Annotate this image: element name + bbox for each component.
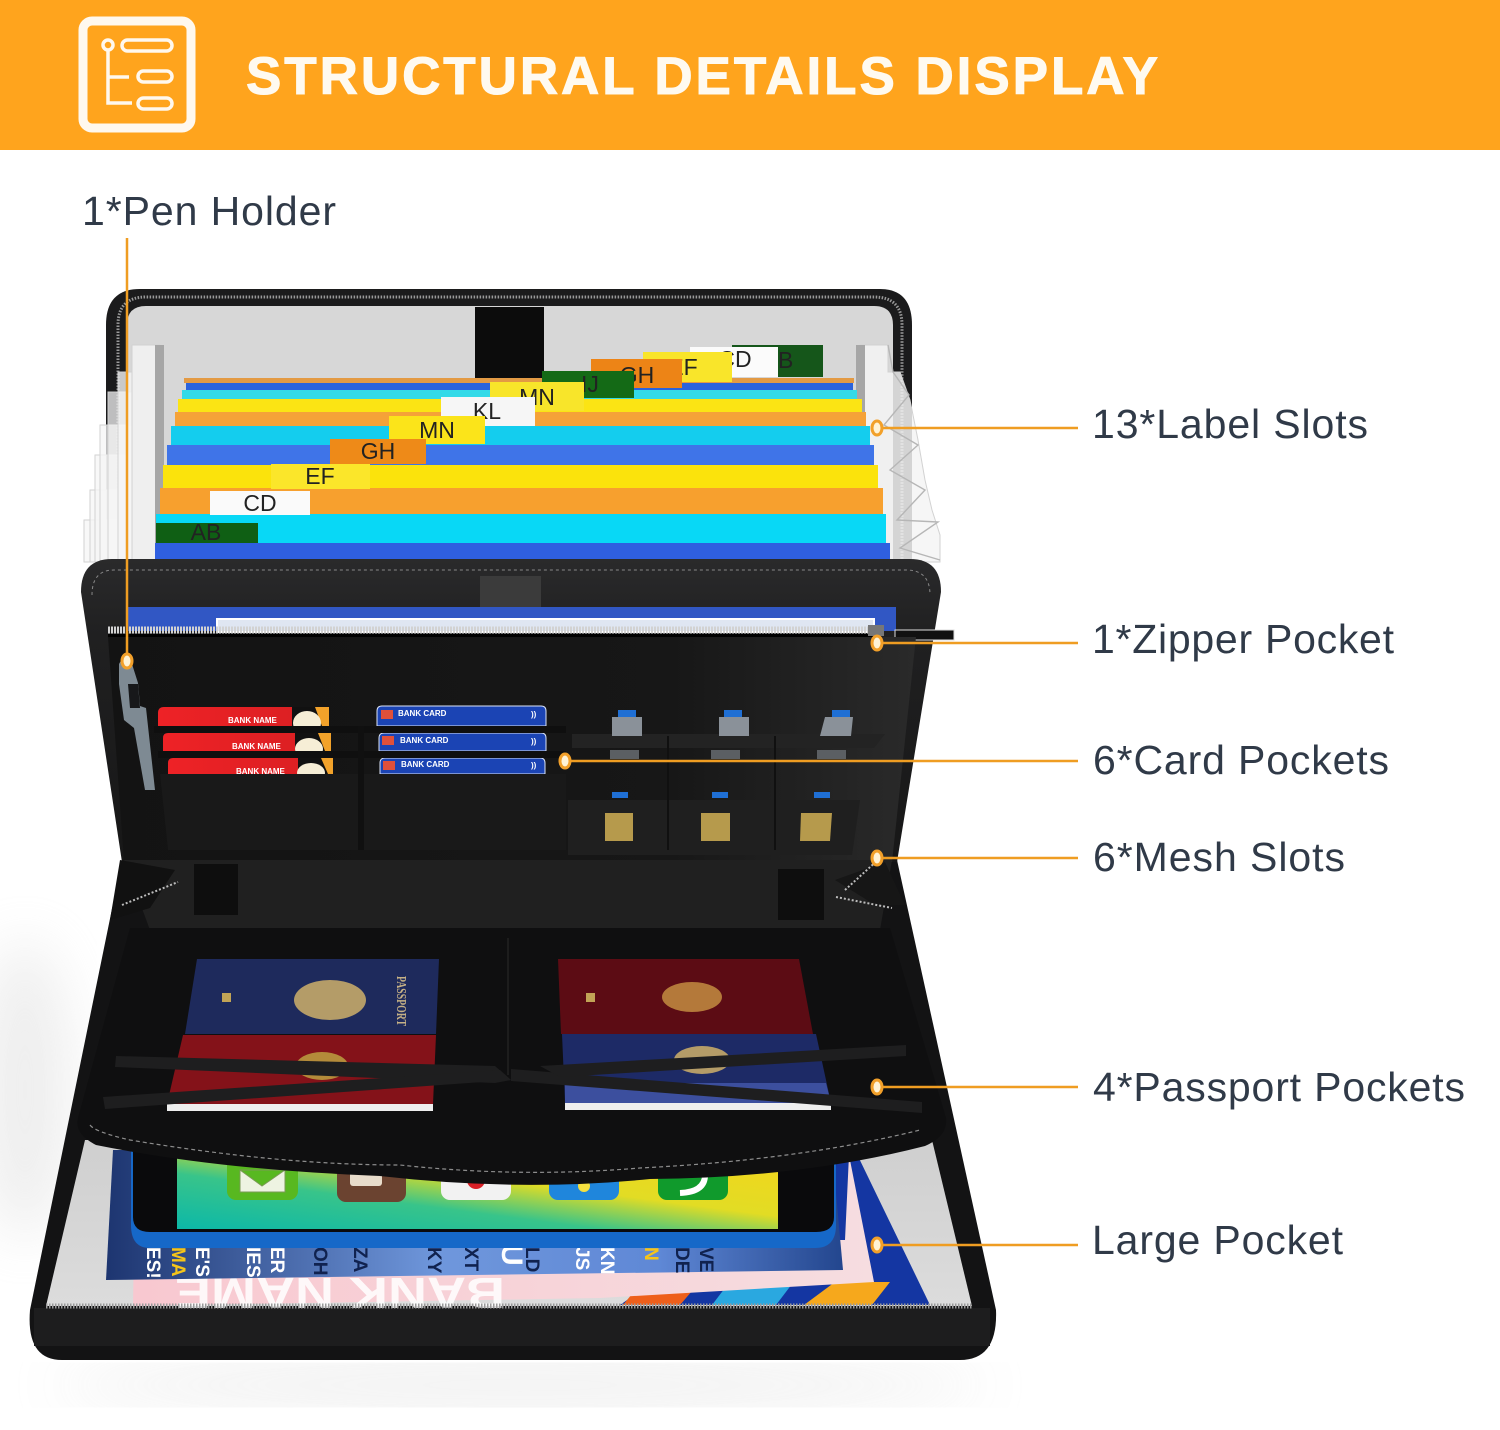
tab KL [441,397,535,426]
magazine: E'S [191,1247,212,1277]
pen [119,660,155,790]
tab AB back [732,345,823,377]
title: STRUCTURAL DETAILS DISPLAY [246,47,1158,106]
magazine [106,1150,843,1280]
red bank cards: BANK NAME [232,742,282,751]
app icons [227,1150,728,1202]
blue bank cards: )) [531,761,537,770]
middle panel and pockets [81,559,954,862]
magazine: KN [596,1247,617,1274]
magazine: N [640,1247,661,1261]
pink document: BANK NAME [175,1268,505,1317]
label: mesh slots: 6*Mesh Slots [1093,834,1345,880]
blue bank cards [377,706,546,774]
accordion gussets [84,345,940,562]
tab MN upper [490,382,584,411]
gold chip cards [605,813,832,841]
header banner [0,0,1500,150]
right gusset sheets [856,345,940,562]
tab GH: GH [361,438,395,464]
magazine: MA [167,1247,188,1277]
tab EF: EF [305,463,335,489]
magazine: OH [309,1247,330,1276]
magazine: U [495,1244,528,1266]
tab MN lower: MN [419,417,455,443]
tab GH [330,438,426,464]
tab AB: AB [191,519,221,545]
magazine: ES! [142,1247,163,1279]
magazine: DE [671,1247,692,1273]
magazine: ER [266,1247,287,1274]
bottom zipper and rail [34,1306,990,1346]
tab AB back: AB [763,347,793,373]
red bank cards: BANK NAME [236,767,286,776]
tab GH back [591,359,682,388]
tab IJ [542,371,634,398]
blue bank cards: )) [531,710,537,719]
tab KL: KL [473,398,501,424]
blue document [620,1150,930,1305]
passport: EU red [558,959,813,1034]
leader: passport pockets [872,1080,1078,1094]
pink document [133,1155,874,1317]
velcro patch [480,576,541,607]
tab CD back: CD [718,346,752,372]
magazine: LD [521,1247,542,1272]
tab EF back [643,352,732,382]
magazine: ZA [349,1247,370,1273]
label: pen holder: 1*Pen Holder [82,188,336,234]
label: large pocket: Large Pocket [1092,1217,1344,1263]
mesh slots pockets [568,710,885,855]
zipper pocket document [128,607,896,632]
icon: structure tree [83,21,191,128]
label: card pockets: 6*Card Pockets [1093,737,1389,783]
label: zipper pocket: 1*Zipper Pocket [1092,616,1395,662]
fold shelf with velcro straps [110,858,905,930]
passport: US blue [185,959,439,1034]
magazine: JS [571,1247,592,1270]
zipper [108,625,954,640]
left gusset sheets [84,345,164,562]
leader: label slots [872,421,1078,435]
tablet [131,1150,836,1248]
tab CD: CD [243,490,277,516]
blue bank cards: )) [531,737,537,746]
leader: pen holder [122,238,132,668]
passport: blue under [562,1034,831,1110]
label: label slots: 13*Label Slots [1092,401,1368,447]
tab MN upper: MN [519,384,555,410]
tab EF [271,463,370,489]
lower body outer shell [30,860,996,1360]
file tabs [156,345,823,545]
tab CD [210,490,310,516]
tab GH back: GH [620,362,654,388]
tab EF back: EF [668,354,698,380]
magazine: XT [460,1247,481,1272]
blue bank cards: BANK CARD [398,709,447,718]
colored file folders [155,378,890,561]
upper flap [81,559,941,862]
leader: card pockets [560,754,1078,768]
magazine: KY [423,1247,444,1274]
blue bank cards: BANK CARD [401,760,450,769]
tab MN lower [389,416,485,444]
magazine: IES [242,1247,263,1278]
organizer: back cover [106,289,912,570]
tab AB [156,519,258,545]
label: passport pockets: 4*Passport Pockets [1093,1064,1465,1110]
magazine: VE [695,1247,716,1272]
passport: red under [167,1035,436,1111]
leader: large pocket [872,1238,1078,1252]
tab IJ: IJ [581,371,599,397]
blue bank cards: BANK CARD [400,736,449,745]
passport pocket flap [77,928,946,1185]
card pocket fronts [154,726,566,850]
leader: zipper pocket [872,636,1078,650]
passport: US blue: PASSPORT [393,976,408,1026]
red bank cards [158,707,333,783]
large pocket contents [106,1150,930,1317]
elastic straps [103,1045,922,1113]
interior panel [108,637,916,862]
leader: mesh slots [872,851,1078,865]
red bank cards: BANK NAME [228,716,278,725]
soft shadows [0,940,990,1399]
tab CD back [690,346,778,377]
elastic strap [475,307,544,379]
USB drives [610,710,853,798]
